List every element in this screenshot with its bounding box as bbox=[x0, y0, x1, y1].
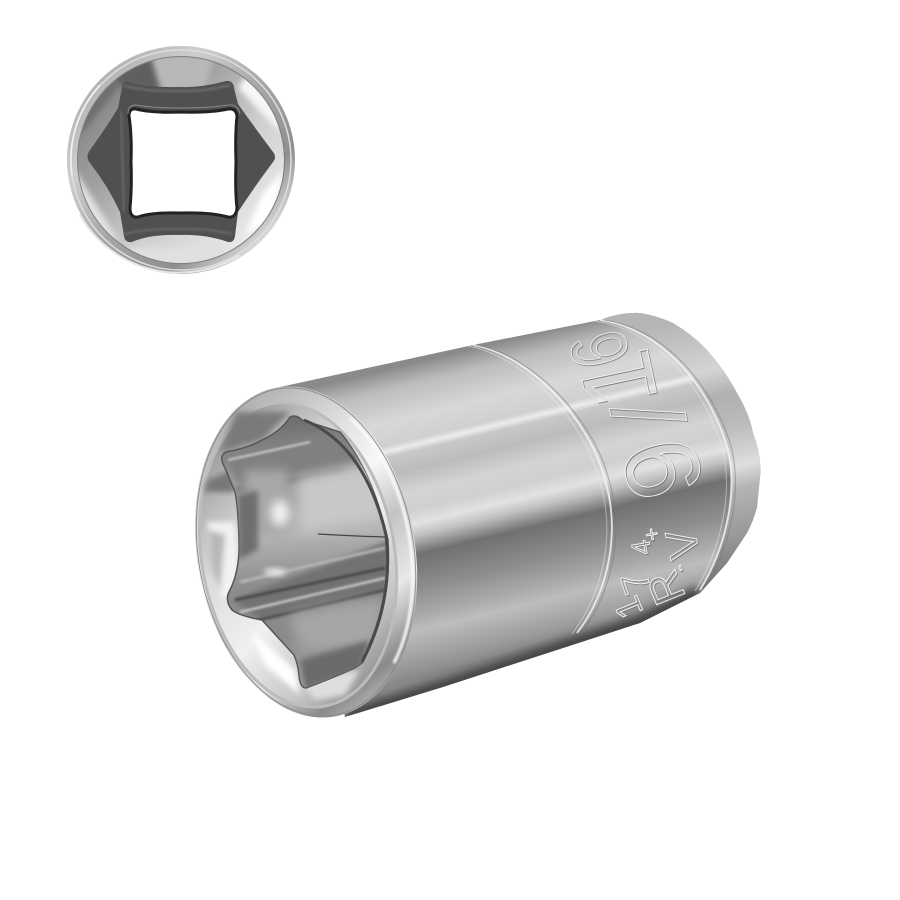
engraved marks: 7 bbox=[613, 566, 660, 599]
engraved marks bbox=[616, 528, 699, 618]
outer ring bbox=[67, 46, 295, 274]
socket body bbox=[280, 312, 760, 717]
engraved marks: + bbox=[638, 526, 665, 543]
engraved marks: 4 bbox=[625, 538, 657, 557]
engraved marks: R bbox=[638, 564, 695, 611]
hex bore bbox=[222, 416, 388, 688]
engraved size text bbox=[570, 332, 701, 498]
chamfer reflections bbox=[204, 470, 235, 492]
front collar bbox=[170, 369, 442, 735]
groove: front band bbox=[468, 345, 616, 634]
engraved marks: V bbox=[657, 525, 710, 563]
engraved size text: 1 bbox=[556, 340, 679, 419]
bore reflections bbox=[225, 432, 392, 690]
illustration: socket perspective view bbox=[194, 312, 760, 718]
drive-end section bbox=[600, 312, 760, 594]
inner chamfer bbox=[175, 385, 421, 725]
hexagon recess bbox=[88, 81, 275, 242]
engraved marks: 1 bbox=[606, 591, 651, 625]
illustration: socket end view bbox=[67, 46, 295, 274]
inner shadow arc bbox=[304, 420, 388, 662]
engraved size text: / bbox=[592, 389, 707, 439]
recess highlights bbox=[124, 85, 230, 91]
square drive hole bbox=[129, 109, 237, 217]
groove: rear band bbox=[595, 320, 735, 591]
chamfer shading bbox=[70, 55, 285, 268]
engraved size text: 6 bbox=[552, 323, 647, 377]
engraved marks: - bbox=[666, 561, 692, 576]
collar highlight band bbox=[350, 418, 413, 663]
engraved size text: 9 bbox=[599, 426, 726, 511]
bottom edge shade bbox=[345, 593, 700, 717]
